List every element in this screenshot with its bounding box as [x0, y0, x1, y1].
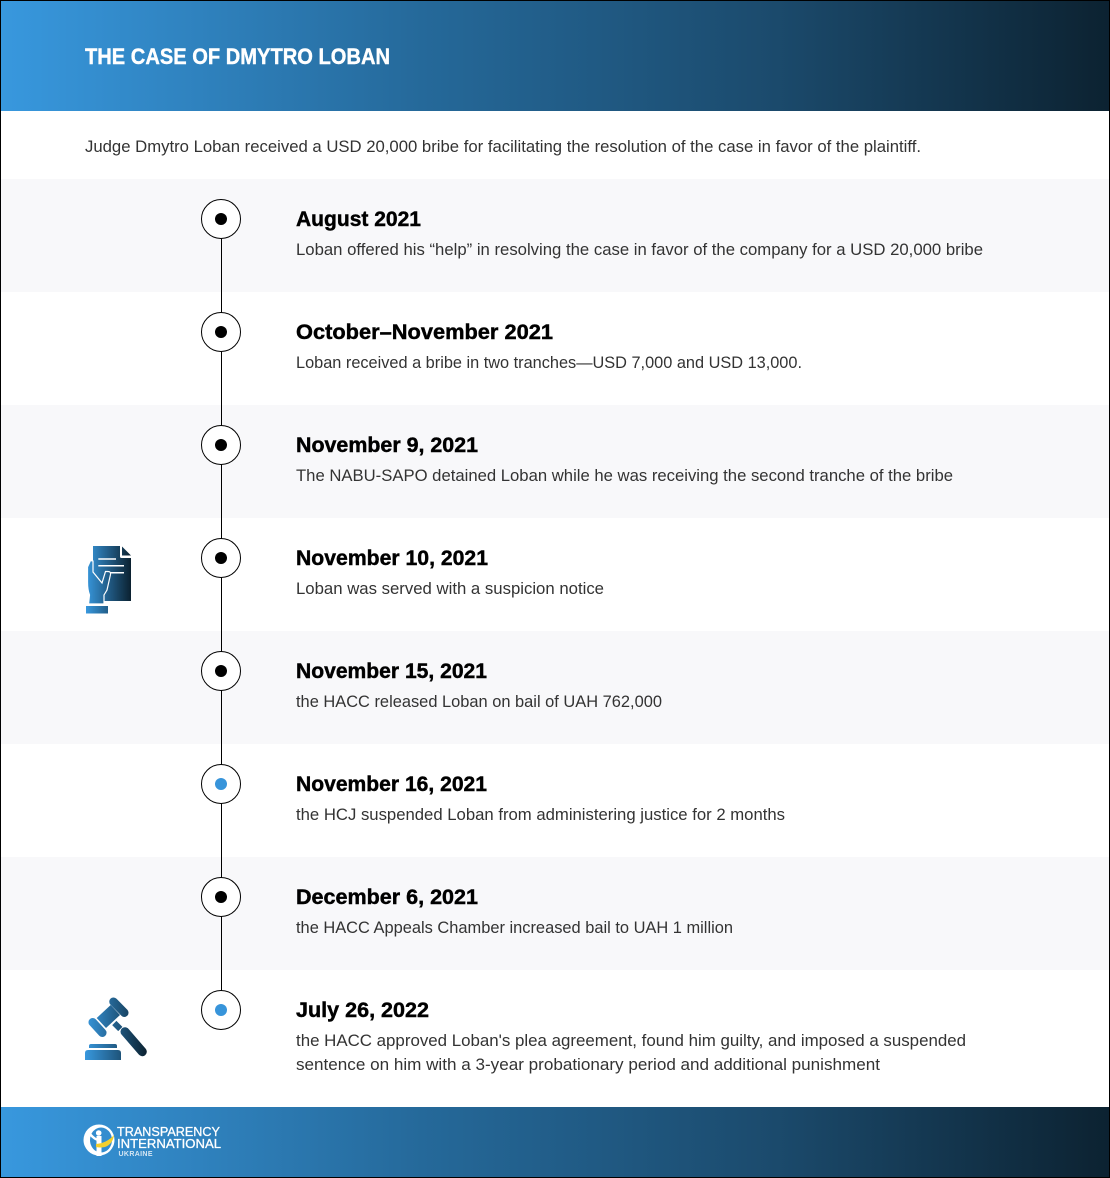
logo: Transparency International Ukraine: UKRAINE — [118, 1151, 153, 1158]
event: July 26, 2022: the HACC approved Loban's plea agreement, found him guilty, and imposed a suspended — [296, 1032, 966, 1050]
timeline marker: November 16 — [202, 764, 240, 804]
event: November 10, 2021 — [296, 546, 604, 598]
event: November 16, 2021: the HCJ suspended Loban from administering justice for 2 months — [296, 806, 785, 824]
event: October-November 2021: October–November 2021 — [296, 320, 553, 344]
icon: hand holding document — [86, 546, 131, 614]
event: October-November 2021: Loban received a bribe in two tranches—USD 7,000 and USD 13,000. — [296, 354, 802, 372]
intro text: Judge Dmytro Loban received a USD 20,000 bribe for facilitating the resolution of the case in favor of the plaintiff. — [85, 138, 921, 156]
timeline marker: July 26 — [202, 990, 240, 1030]
event: July 26, 2022: July 26, 2022 — [296, 998, 429, 1022]
event: November 9, 2021: The NABU-SAPO detained Loban while he was receiving the second tranche of the bribe — [296, 467, 953, 485]
timeline marker: October-November 2021 — [202, 312, 240, 352]
event: August 2021 — [296, 207, 983, 259]
timeline marker: November 10 — [202, 538, 240, 578]
timeline line — [220, 220, 222, 1000]
panel: row band November 9 — [0, 405, 1110, 518]
event: December 6, 2021: the HACC Appeals Chamber increased bail to UAH 1 million — [296, 919, 733, 937]
logo: Transparency International Ukraine: TRANSPARENCY — [117, 1124, 220, 1139]
event: November 15, 2021: the HACC released Loban on bail of UAH 762,000 — [296, 693, 662, 711]
event: November 9, 2021: November 9, 2021 — [296, 433, 478, 457]
event: October-November 2021 — [296, 320, 802, 372]
timeline marker: December 6 — [202, 878, 240, 916]
event: November 10, 2021: November 10, 2021 — [296, 546, 488, 570]
timeline marker: November 15 — [202, 652, 240, 690]
timeline marker: August 2021 — [202, 200, 240, 238]
event: December 6, 2021 — [296, 885, 733, 937]
event: November 16, 2021 — [296, 772, 785, 824]
logo: Transparency International Ukraine — [84, 1124, 221, 1158]
event: August 2021: August 2021 — [296, 207, 421, 231]
panel: row band August 2021 — [0, 179, 1110, 292]
event: November 15, 2021 — [296, 659, 662, 711]
event: November 15, 2021: November 15, 2021 — [296, 659, 487, 683]
event: December 6, 2021: December 6, 2021 — [296, 885, 478, 909]
event: July 26, 2022: sentence on him with a 3-year probationary period and additional punishment — [296, 1056, 881, 1074]
event: July 26, 2022 — [296, 998, 966, 1074]
event: November 9, 2021 — [296, 433, 953, 485]
title: THE CASE OF DMYTRO LOBAN — [85, 44, 390, 69]
event: August 2021: Loban offered his “help” in resolving the case in favor of the company for a USD 20,000 bribe — [296, 241, 983, 259]
event: November 16, 2021: November 16, 2021 — [296, 772, 487, 796]
logo: Transparency International Ukraine: INTERNATIONAL — [117, 1136, 221, 1151]
icon: gavel — [85, 1002, 142, 1060]
event: November 10, 2021: Loban was served with a suspicion notice — [296, 580, 604, 598]
panel: footer band — [0, 1107, 1110, 1178]
panel: row band November 15 — [0, 631, 1110, 744]
panel: header band — [0, 0, 1110, 111]
panel: row band December 6 — [0, 857, 1110, 970]
timeline marker: November 9 — [202, 426, 240, 464]
